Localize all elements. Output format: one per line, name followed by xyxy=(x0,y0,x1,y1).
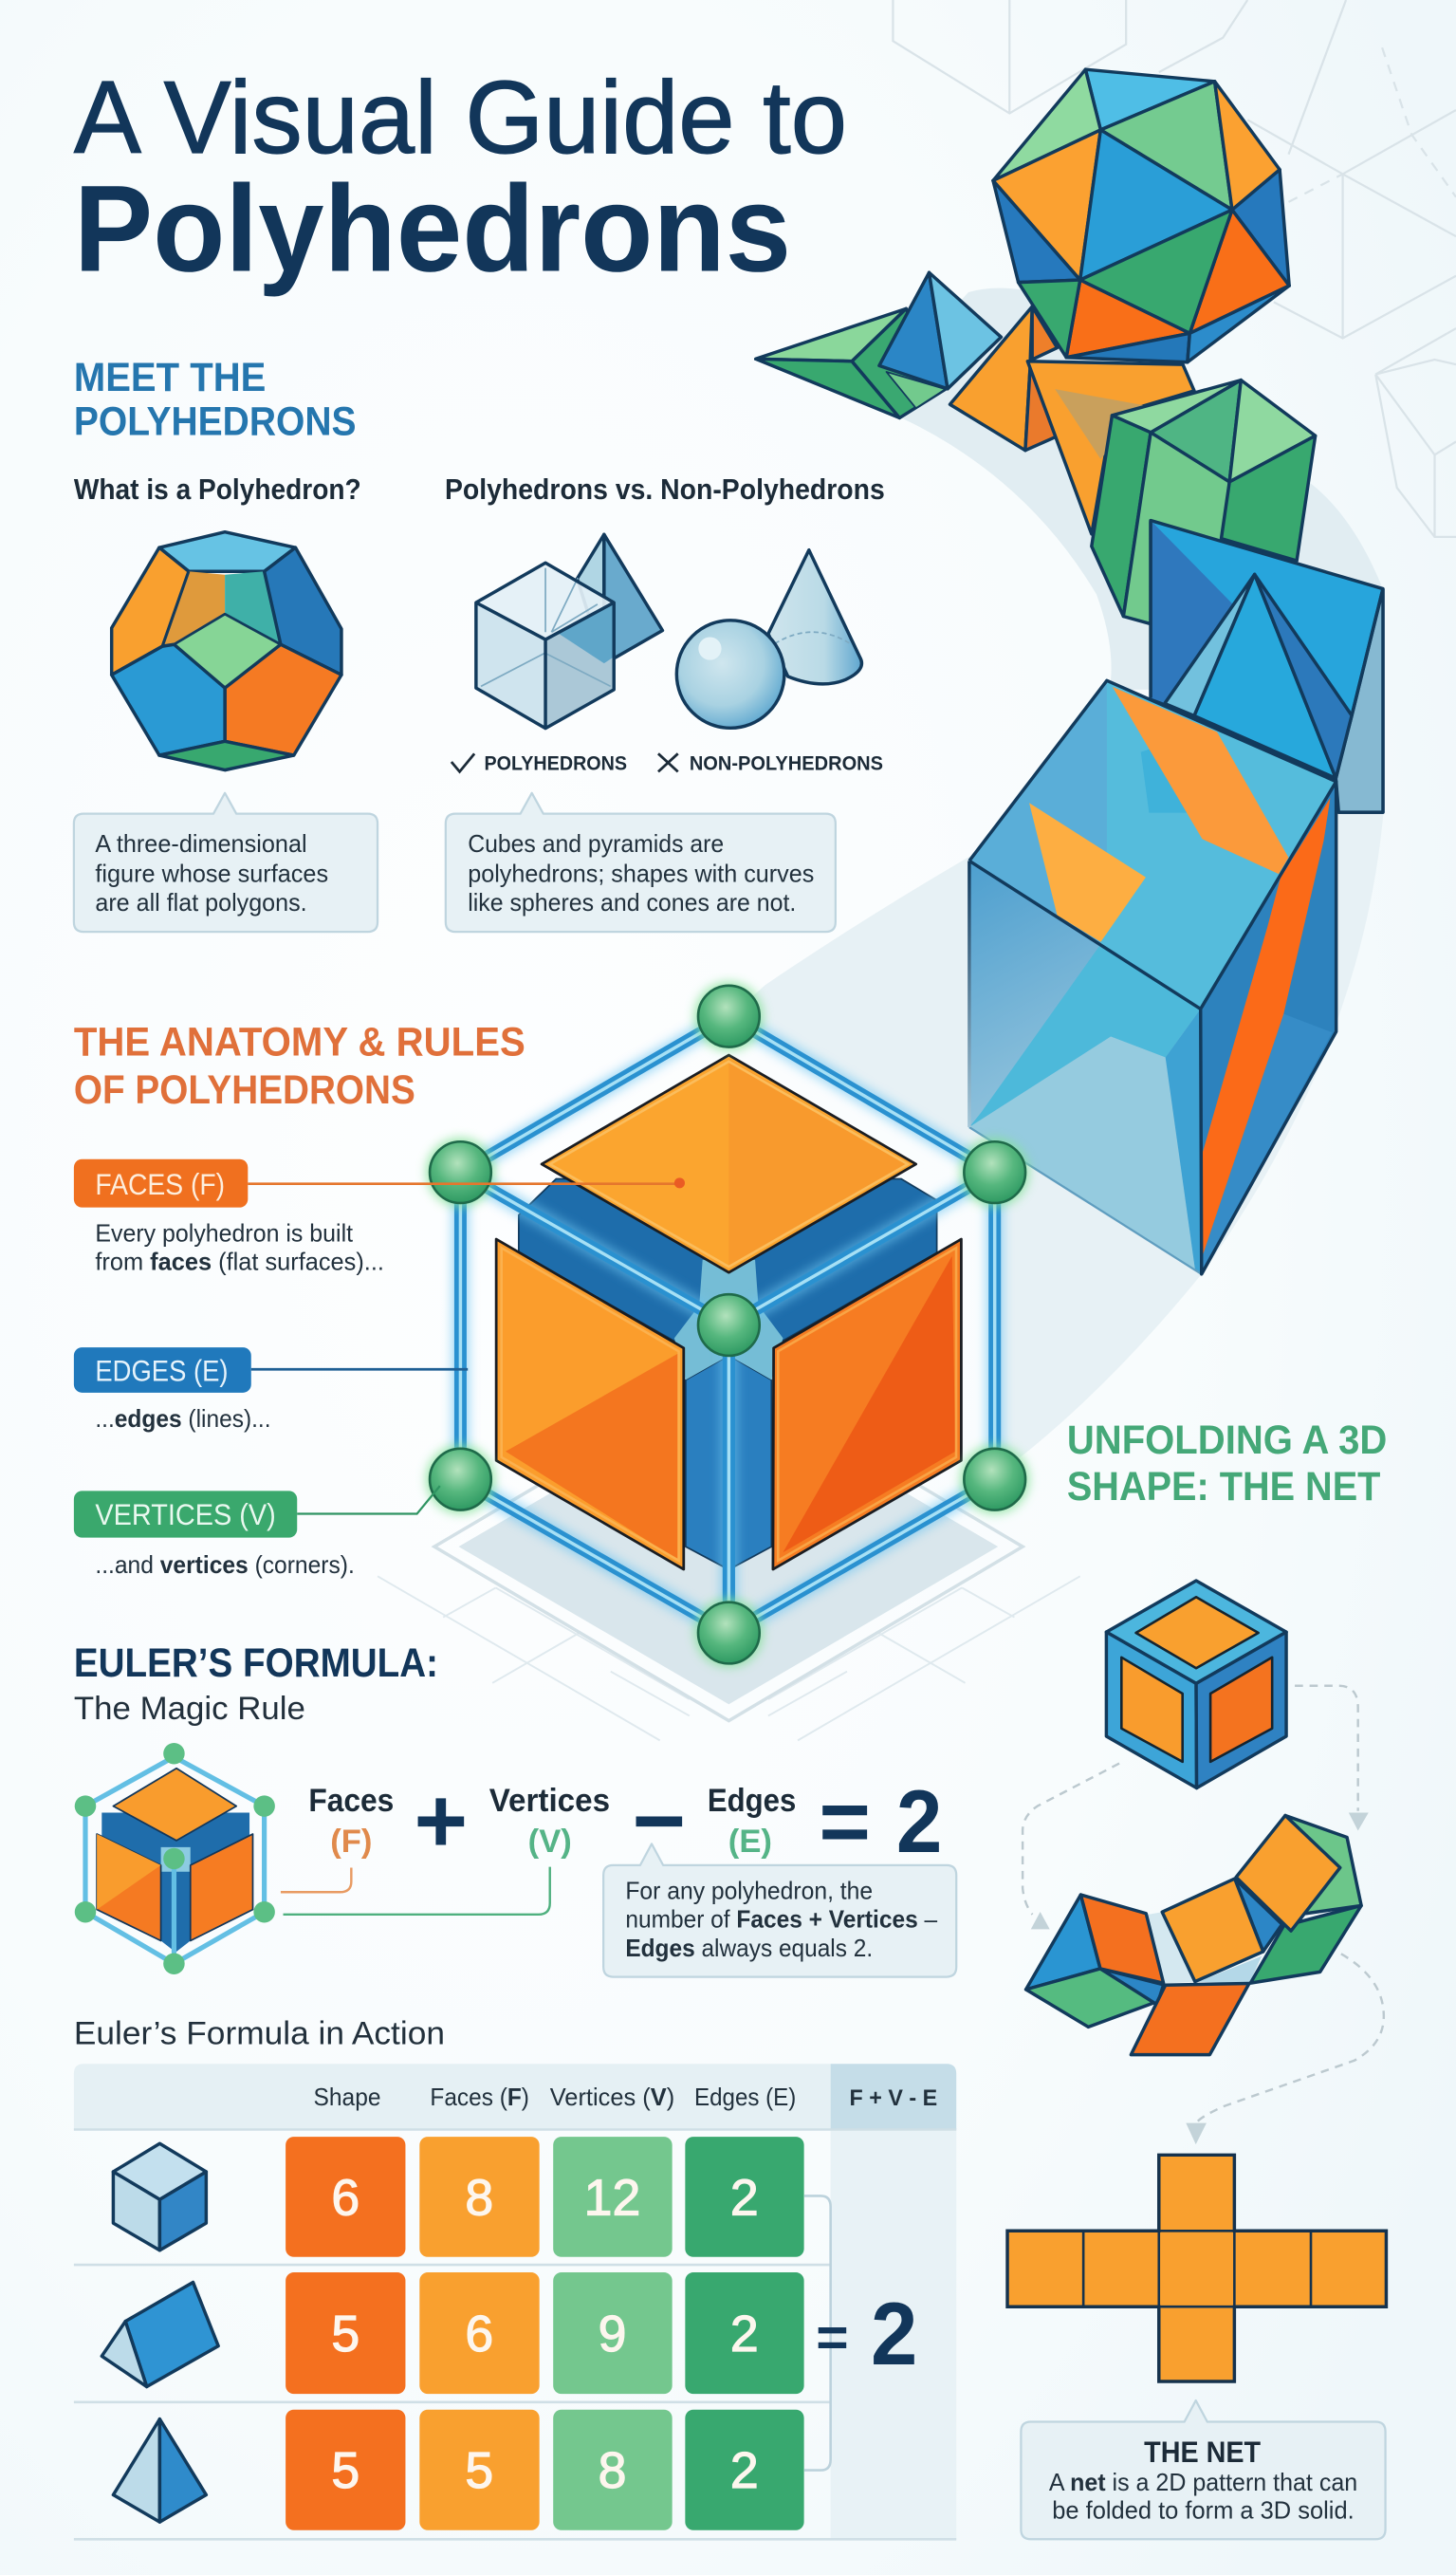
panel: polyhedrons vs non-polyhedrons xyxy=(445,474,885,932)
values: 6 8 12 2: 8 xyxy=(465,2169,493,2226)
values: 6 8 12 2: 2 xyxy=(730,2169,759,2226)
heading: euler's formula: EULER’S FORMULA: xyxy=(74,1640,438,1686)
icon: pyramid xyxy=(113,2419,206,2522)
values: 5 5 8 2 xyxy=(286,2410,804,2530)
callout: comparison: polyhedrons; shapes with curves xyxy=(468,861,814,887)
heading: euler's formula: The Magic Rule xyxy=(74,1691,305,1727)
icon: cone xyxy=(768,550,861,684)
connector: vertices xyxy=(284,1867,550,1915)
vertices xyxy=(430,986,1025,1663)
pill: FACES (F) xyxy=(95,1168,225,1201)
callout: definition: A three-dimensional xyxy=(95,831,307,858)
heading: meet the polyhedrons: MEET THE xyxy=(74,355,266,400)
frame: center edge over column xyxy=(726,1325,732,1633)
diagram: central cube anatomy xyxy=(378,982,1080,1740)
icon: green spike xyxy=(756,308,946,417)
icon: small anatomy cube xyxy=(75,1743,275,1974)
wireframe background shapes xyxy=(893,0,1456,537)
leader line xyxy=(297,1486,440,1514)
heading: unfolding a 3d shape: UNFOLDING A 3D xyxy=(1067,1417,1387,1463)
callout: the net: be folded to form a 3D solid. xyxy=(1052,2498,1355,2525)
values: 5 6 9 2 xyxy=(286,2272,804,2394)
icon: glass pyramid xyxy=(577,534,662,663)
formula: F + V - E = 2 xyxy=(281,1769,942,1915)
icon: icosahedron xyxy=(993,69,1289,362)
values: 5 6 9 2: 5 xyxy=(331,2306,359,2362)
icon: blue sheet with pyramid xyxy=(1151,521,1383,812)
description: ...edges (lines)... xyxy=(95,1406,271,1433)
arrow: cube to folded left xyxy=(1023,1764,1119,1929)
table header: Vertices (V) xyxy=(550,2084,674,2111)
values: 6 8 12 2: 6 xyxy=(331,2169,359,2226)
result: equals two: = xyxy=(816,2306,849,2368)
values: 5 6 9 2: 6 xyxy=(465,2306,493,2362)
term: faces xyxy=(308,1783,394,1860)
equals two: 2 xyxy=(896,1771,942,1871)
floating polyhedrons xyxy=(756,69,1383,1274)
result: equals two xyxy=(816,2284,917,2383)
values: 5 5 8 2: 5 xyxy=(465,2442,493,2499)
arrow: cube to folded right xyxy=(1295,1686,1369,1831)
callout: the net: THE NET xyxy=(1144,2436,1261,2469)
panel: what is a polyhedron xyxy=(74,474,378,932)
heading: euler's formula in action: Euler’s Formula in Action xyxy=(74,2016,445,2052)
title xyxy=(74,60,847,298)
icon: orange pyramid xyxy=(949,306,1059,451)
values: 5 5 8 2: 2 xyxy=(730,2442,759,2499)
result: equals two: 2 xyxy=(871,2284,917,2383)
table backgrounds and rules xyxy=(74,2064,956,2539)
row: triangular prism xyxy=(101,2272,804,2394)
values: 6 8 12 2: 12 xyxy=(584,2169,640,2226)
values: 5 6 9 2: 9 xyxy=(599,2306,626,2362)
term: faces: Faces xyxy=(308,1783,394,1819)
icon: large translucent cube xyxy=(969,680,1336,1274)
callout: comparison: Cubes and pyramids are xyxy=(468,831,724,858)
row: pyramid xyxy=(113,2410,804,2530)
pill: VERTICES (V) xyxy=(95,1498,276,1531)
label: faces xyxy=(74,1159,685,1276)
term: vertices xyxy=(489,1783,610,1860)
title: A Visual Guide to xyxy=(74,60,847,176)
isometric floor grid xyxy=(378,1373,1080,1740)
callout: comparison: like spheres and cones are not. xyxy=(468,890,796,917)
heading: meet the polyhedrons: POLYHEDRONS xyxy=(74,399,357,445)
heading: anatomy and rules xyxy=(74,1020,525,1113)
heading: anatomy and rules: OF POLYHEDRONS xyxy=(74,1067,415,1113)
table header: Edges (E) xyxy=(694,2084,796,2111)
icon: cube xyxy=(113,2143,206,2251)
term: edges xyxy=(708,1783,796,1860)
legend: non-polyhedrons: NON-POLYHEDRONS xyxy=(690,751,883,775)
face: top diamond xyxy=(542,1055,916,1272)
title: Polyhedrons xyxy=(74,160,791,298)
callout: the net: A net is a 2D pattern that can xyxy=(1049,2470,1357,2496)
callout: definition xyxy=(74,793,378,932)
legend: polyhedrons: POLYHEDRONS xyxy=(485,751,627,775)
minus sign: − xyxy=(633,1769,686,1872)
term: edges: Edges xyxy=(708,1783,796,1819)
icon: partially unfolded cube xyxy=(1026,1815,1361,2055)
pill: EDGES (E) xyxy=(95,1354,229,1387)
term: vertices: Vertices xyxy=(489,1783,610,1819)
description xyxy=(95,1220,384,1276)
vertex glows xyxy=(426,982,1029,1667)
callout: euler explanation: number of Faces + Vertices – xyxy=(625,1907,938,1934)
values: 5 5 8 2: 5 xyxy=(331,2442,359,2499)
table header: Faces (F) xyxy=(430,2084,529,2111)
cube body xyxy=(519,1179,937,1569)
values: 5 5 8 2: 8 xyxy=(599,2442,626,2499)
equals two: = xyxy=(819,1771,871,1871)
pill xyxy=(74,1159,248,1208)
row: cube xyxy=(113,2137,804,2257)
callout: euler explanation xyxy=(603,1843,956,1977)
callout: definition: figure whose surfaces xyxy=(95,861,328,887)
leader line xyxy=(248,1177,685,1188)
callout: definition: are all flat polygons. xyxy=(95,890,307,917)
arrow: folded to net xyxy=(1186,1954,1384,2144)
face: left panel xyxy=(496,1239,684,1569)
heading: euler's formula xyxy=(74,1640,438,1727)
term: vertices: (V) xyxy=(528,1824,572,1860)
icon: green prism xyxy=(1092,380,1316,624)
heading: meet the polyhedrons xyxy=(74,355,357,445)
connector: faces xyxy=(281,1867,351,1892)
heading: anatomy and rules: THE ANATOMY & RULES xyxy=(74,1020,525,1065)
diagram: flat cube net xyxy=(1007,2155,1386,2381)
icon: sphere xyxy=(676,621,784,728)
leader line xyxy=(251,1368,468,1370)
pill xyxy=(74,1347,251,1393)
heading: unfolding a 3d shape: SHAPE: THE NET xyxy=(1067,1464,1380,1510)
term: faces: (F) xyxy=(330,1824,372,1860)
values: 6 8 12 2 xyxy=(286,2137,804,2257)
table: euler's formula in action xyxy=(74,2064,956,2539)
icon: net section cube xyxy=(1106,1581,1286,1788)
term: edges: (E) xyxy=(728,1824,772,1860)
description: ...and vertices (corners). xyxy=(95,1552,355,1579)
subheading: Polyhedrons vs. Non-Polyhedrons xyxy=(445,474,885,506)
values: 5 6 9 2: 2 xyxy=(730,2306,759,2362)
description: from faces (flat surfaces)... xyxy=(95,1250,384,1276)
callout: euler explanation: For any polyhedron, the xyxy=(625,1878,873,1904)
swoosh band behind shapes xyxy=(728,288,1384,1477)
description: Every polyhedron is built xyxy=(95,1220,354,1247)
plus sign: + xyxy=(415,1769,468,1872)
callout: comparison xyxy=(446,793,836,932)
callout: euler explanation: Edges always equals 2. xyxy=(625,1936,873,1962)
table header: Shape xyxy=(314,2084,380,2111)
frame: edges xyxy=(460,1016,995,1633)
equals two xyxy=(819,1771,942,1871)
icon: prism xyxy=(101,2282,218,2387)
label: edges xyxy=(74,1347,468,1433)
icon: small blue pyramid xyxy=(879,272,1001,389)
subheading: What is a Polyhedron? xyxy=(74,474,361,506)
table header xyxy=(314,2084,937,2111)
pill xyxy=(74,1491,297,1538)
heading: unfolding a 3d shape xyxy=(1067,1417,1387,1510)
label: vertices xyxy=(74,1486,440,1579)
table header: F + V - E xyxy=(850,2085,937,2111)
bracket xyxy=(804,2195,831,2471)
callout: the net xyxy=(1021,2400,1386,2539)
face: right panel xyxy=(773,1239,961,1569)
icon: dodecahedron xyxy=(112,532,341,770)
frame: edges glow xyxy=(460,1016,995,1633)
icon: glass cube xyxy=(476,563,614,729)
icon: orange prism xyxy=(1027,361,1194,534)
